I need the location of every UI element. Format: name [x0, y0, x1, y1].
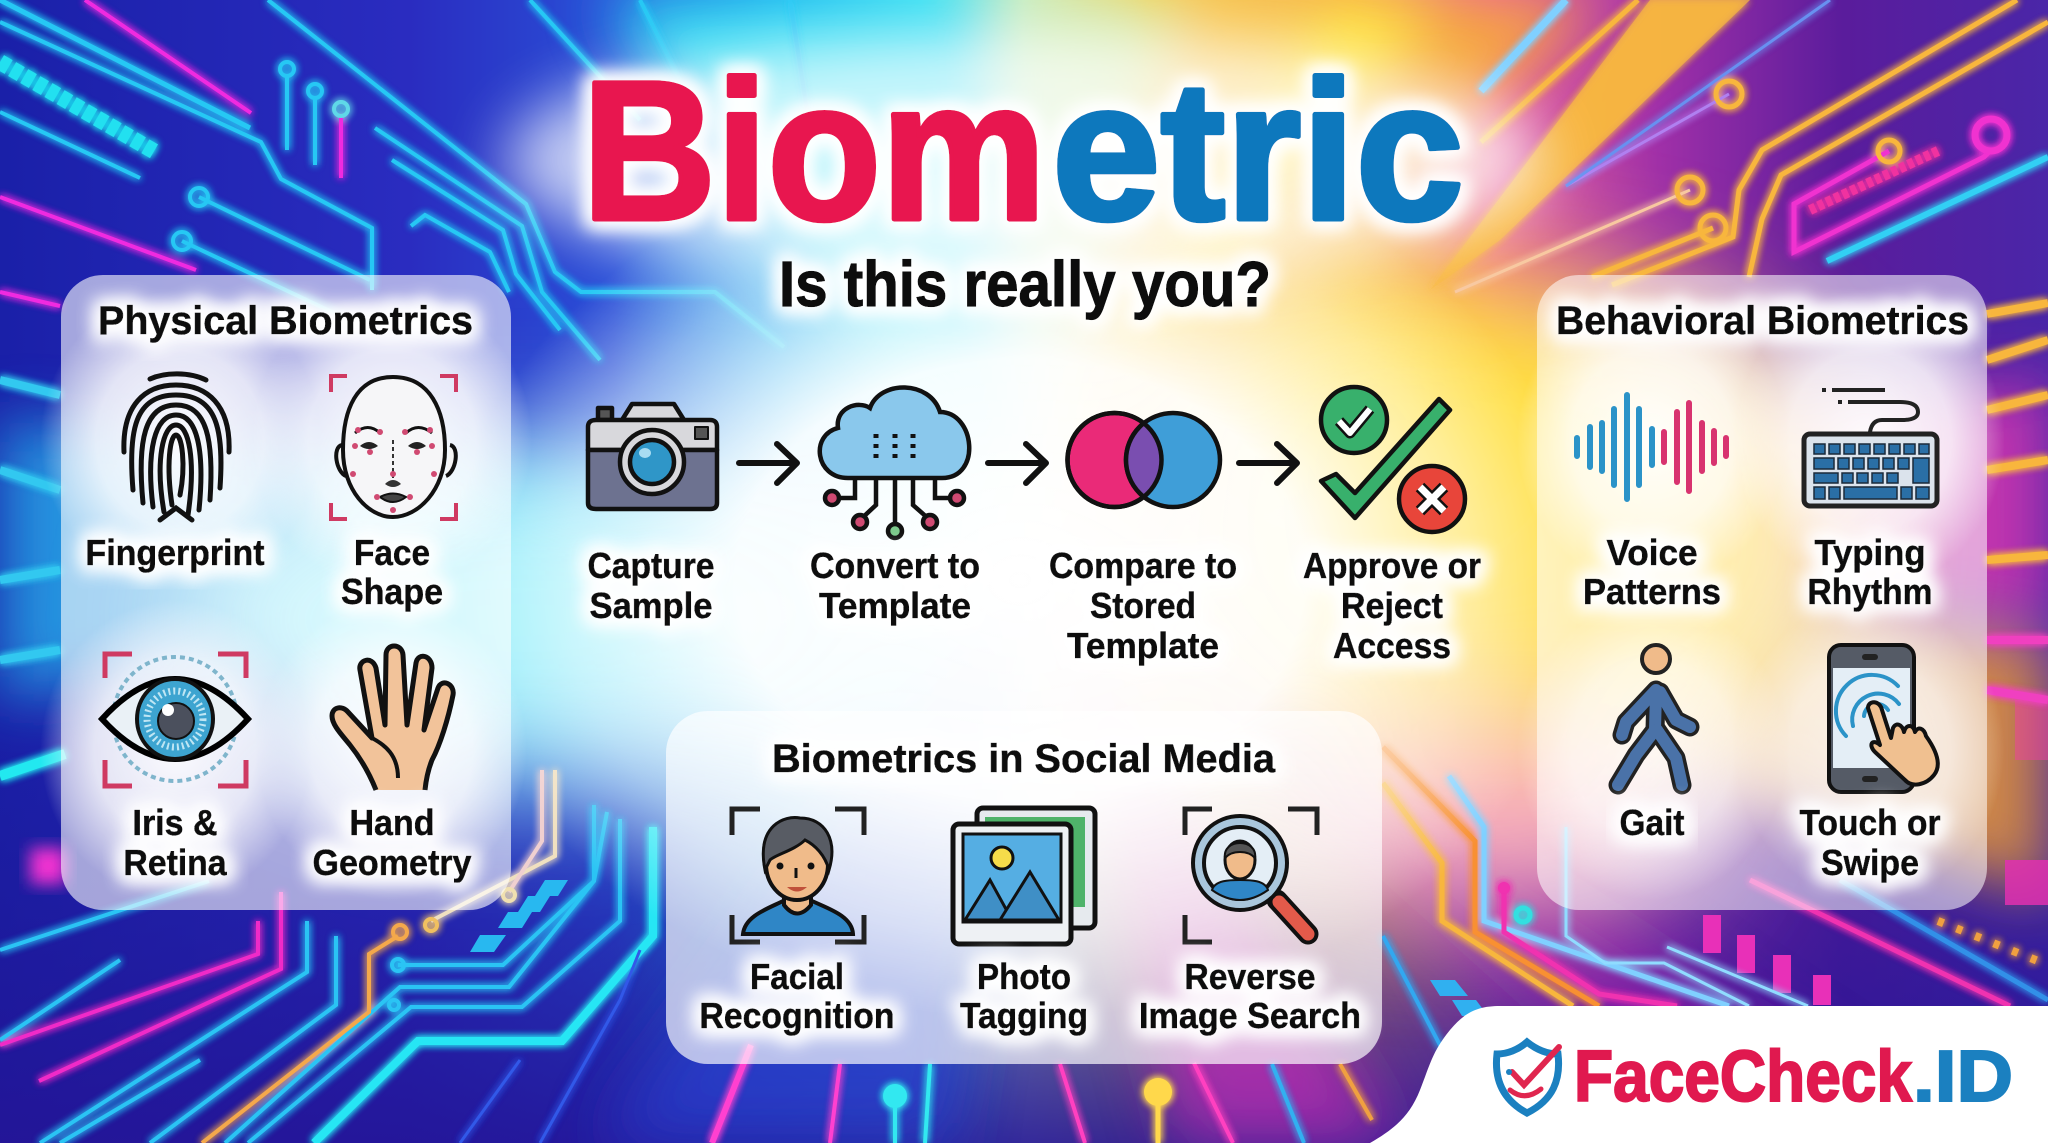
label: approve or reject access: Reject: [1341, 585, 1443, 626]
label: photo tagging: Tagging: [960, 995, 1088, 1036]
panel: biometrics in social media: [666, 711, 1382, 1064]
icon: fingerprint: [124, 374, 229, 520]
icon: approve or reject: [1321, 387, 1465, 532]
label: voice patterns: Patterns: [1583, 571, 1721, 612]
label: capture sample: Capture: [588, 545, 714, 586]
icon: face shape: [331, 376, 456, 519]
label: hand geometry: Hand: [350, 802, 434, 843]
label: reverse image search: Reverse: [1184, 956, 1316, 997]
logo card: FaceCheck.ID: [1370, 1006, 2048, 1143]
panel: behavioral biometrics: [1517, 275, 2005, 910]
icon: gait walking figure: [1618, 645, 1690, 785]
background: circuit traces left: [0, 0, 810, 776]
background: circuit traces bottom: [0, 770, 1442, 1143]
label: capture sample: [588, 545, 714, 626]
label: compare to stored template: Compare to: [1049, 545, 1237, 586]
label: photo tagging: Photo: [977, 956, 1071, 997]
label: compare to stored template: Stored: [1090, 585, 1196, 626]
wordmark: .ID: [1913, 1037, 2013, 1117]
arrow: template to compare: [988, 444, 1046, 483]
label: typing rhythm: Rhythm: [1808, 571, 1932, 612]
label: face shape: Face: [354, 532, 430, 573]
subtitle: Is this really you?: [779, 248, 1271, 320]
background: circuit traces right: [1383, 0, 2048, 1006]
label: typing rhythm: Typing: [1814, 532, 1926, 573]
wordmark: FaceCheck: [1574, 1037, 1913, 1117]
label: touch or swipe: Touch or: [1800, 802, 1940, 843]
label: approve or reject access: Approve or: [1303, 545, 1481, 586]
label: photo tagging: [960, 956, 1088, 1036]
label: touch or swipe: [1800, 802, 1940, 883]
icon: shield logo: [1496, 1042, 1559, 1113]
label: facial recognition: [700, 956, 894, 1036]
icon: keyboard: [1804, 390, 1937, 506]
heading: physical biometrics: Physical Biometrics: [98, 299, 473, 343]
label: typing rhythm: [1808, 532, 1932, 612]
heading: behavioral biometrics: Behavioral Biometrics: [1556, 299, 1969, 343]
background: small rectangles: [30, 700, 2048, 1016]
label: voice patterns: [1583, 532, 1721, 612]
label: iris and retina: Iris &: [132, 802, 218, 843]
label: compare to stored template: [1049, 545, 1237, 666]
icon: photo tagging: [953, 808, 1095, 944]
icon: cloud circuit template: [820, 387, 969, 538]
heading: biometrics in social media: Biometrics in Social Media: [772, 737, 1276, 781]
title: etric: [1052, 40, 1464, 261]
label: voice patterns: Voice: [1606, 532, 1698, 573]
label: face shape: Shape: [341, 571, 443, 612]
label: hand geometry: [312, 802, 472, 883]
label: fingerprint: Fingerprint: [86, 532, 265, 573]
arrow: capture to template: [739, 444, 797, 483]
arrow: compare to approve: [1239, 444, 1297, 483]
label: convert to template: [810, 545, 980, 626]
title: Biom: [582, 40, 1046, 261]
icon: voice waveform: [1577, 395, 1726, 499]
label: convert to template: Template: [819, 585, 971, 626]
label: approve or reject access: Access: [1333, 625, 1451, 666]
label: iris and retina: [124, 802, 227, 883]
label: compare to stored template: Template: [1067, 625, 1219, 666]
label: reverse image search: Image Search: [1139, 995, 1361, 1036]
label: face shape: [341, 532, 443, 612]
label: reverse image search: [1139, 956, 1361, 1036]
icon: camera: [588, 404, 717, 509]
label: touch or swipe: Swipe: [1821, 842, 1919, 883]
icon: iris and retina: [102, 654, 248, 786]
panel: physical biometrics: [40, 275, 532, 910]
label: gait: Gait: [1620, 802, 1685, 843]
label: hand geometry: Geometry: [312, 842, 472, 883]
icon: hand geometry: [332, 646, 453, 790]
label: facial recognition: Facial: [750, 956, 844, 997]
label: approve or reject access: [1303, 545, 1481, 666]
label: convert to template: Convert to: [810, 545, 980, 586]
label: iris and retina: Retina: [124, 842, 227, 883]
icon: facial recognition: [732, 809, 864, 942]
icon: venn compare: [1068, 413, 1220, 507]
icon: reverse image search: [1185, 809, 1317, 942]
label: facial recognition: Recognition: [700, 995, 894, 1036]
background: central white glow: [450, 30, 1590, 1020]
title: [582, 40, 1464, 261]
icon: touch or swipe phone: [1829, 645, 1938, 792]
label: capture sample: Sample: [590, 585, 712, 626]
